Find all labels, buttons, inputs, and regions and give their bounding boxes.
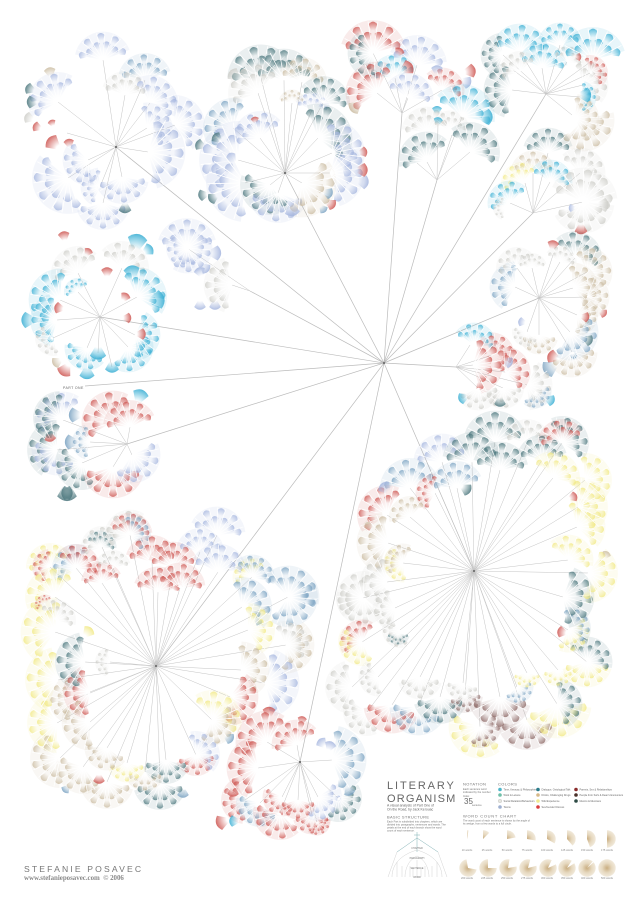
word count chart: 350 words bbox=[561, 876, 574, 880]
word count chart: 150 words bbox=[581, 848, 594, 852]
basic structure diagram: WORD bbox=[413, 876, 421, 879]
colors legend: Towns bbox=[504, 806, 511, 809]
word count caption: The word count of each sentence is shown by the angle of bbox=[463, 818, 530, 822]
branches bbox=[58, 60, 175, 203]
word count chart: 400 words bbox=[581, 876, 594, 880]
notation: indicated by the number bbox=[463, 790, 491, 794]
tree: chapter top middle bbox=[334, 20, 477, 116]
hub dots bbox=[115, 146, 475, 763]
word count chart heading: WORD COUNT CHART bbox=[463, 814, 517, 818]
title: LITERARY bbox=[387, 780, 456, 792]
branches bbox=[57, 420, 132, 467]
branches bbox=[352, 442, 588, 727]
colors legend: Sex/Gender Discuss bbox=[542, 806, 565, 809]
tree: chapter top left bbox=[16, 29, 213, 230]
word count chart: 225 words bbox=[481, 876, 494, 880]
basic structure heading: BASIC STRUCTURE bbox=[387, 814, 429, 820]
word count chart: 25 words bbox=[482, 848, 493, 852]
tree: chapter right tan bbox=[484, 222, 622, 383]
word count chart: 125 words bbox=[561, 848, 574, 852]
word count chart: 50 words bbox=[502, 848, 513, 852]
word count chart: 200 words bbox=[461, 876, 474, 880]
subtitle: On the Road, by Jack Kerouac bbox=[387, 808, 433, 812]
subtitle: A visual analysis of Part One of bbox=[387, 804, 434, 808]
part one label: PART ONE bbox=[63, 386, 84, 390]
notation bbox=[463, 782, 491, 807]
word count chart bbox=[459, 830, 616, 880]
colors legend: People from Sal's & Dean's Encounters bbox=[580, 794, 624, 797]
word count caption: its wedge, from a few words to a full circle. bbox=[463, 822, 512, 826]
main branches from central hub bbox=[85, 94, 546, 762]
colors legend: Drinks, Challenging Drugs bbox=[542, 794, 571, 797]
sections bbox=[454, 317, 557, 414]
sections bbox=[16, 29, 213, 230]
sections bbox=[389, 74, 511, 174]
branches bbox=[50, 535, 288, 783]
colors legend: Parents, Sex & Relationships bbox=[580, 788, 613, 792]
tree: chapter right yellow and white bbox=[480, 128, 622, 238]
tree: chapter bottom center red bbox=[214, 699, 371, 849]
sections bbox=[189, 37, 374, 230]
sections bbox=[479, 21, 625, 162]
sections bbox=[21, 378, 171, 501]
basic structure text: count of each sentence. bbox=[387, 828, 415, 832]
colors legend: Social Relations/Behaviours bbox=[504, 800, 535, 803]
sections bbox=[214, 699, 371, 849]
notation: NOTATION bbox=[463, 782, 486, 786]
tree: chapter bottom right large bbox=[325, 406, 626, 770]
tree: chapter left teal bbox=[20, 230, 178, 382]
basic structure text: petals at the end of each branch show the word bbox=[387, 826, 442, 830]
branches bbox=[245, 742, 338, 822]
word count chart: 75 words bbox=[522, 848, 533, 852]
sections bbox=[20, 230, 178, 382]
notation: sentence bbox=[472, 804, 482, 807]
title bbox=[387, 780, 456, 805]
sections bbox=[484, 222, 622, 383]
colors legend: Time, Kerouac & Philosophies bbox=[504, 788, 538, 792]
basic structure text: divided into paragraphs, sentences and words. The bbox=[387, 822, 446, 826]
basic structure diagram: SENTENCE bbox=[410, 867, 424, 870]
branches bbox=[456, 345, 527, 388]
notation: Index bbox=[463, 794, 470, 798]
title: ORGANISM bbox=[387, 793, 456, 805]
word count chart: 100 words bbox=[541, 848, 554, 852]
sections bbox=[325, 406, 626, 770]
tree: chapter small teal and grey bbox=[389, 74, 511, 180]
notation: 35 bbox=[464, 797, 473, 806]
colors legend: Wild Experience bbox=[542, 800, 560, 803]
colors legend bbox=[498, 782, 624, 809]
word count chart: 275 words bbox=[521, 876, 534, 880]
basic structure diagram bbox=[388, 832, 447, 879]
tree: chapter top right bbox=[479, 21, 625, 162]
colors legend: Dialogue, Ontological Talk bbox=[542, 788, 571, 792]
sections bbox=[158, 218, 232, 312]
tree: lavender chapter bbox=[158, 218, 250, 312]
branches bbox=[417, 117, 470, 180]
branches bbox=[503, 45, 593, 115]
basic structure diagram: CHAPTER bbox=[411, 847, 423, 850]
tree: chapter bottom left large bbox=[11, 500, 330, 810]
sections bbox=[480, 128, 622, 238]
basic structure diagram: PARAGRAPH bbox=[410, 857, 425, 860]
branches bbox=[515, 255, 587, 352]
author credit: STEFANIE POSAVEC bbox=[24, 864, 143, 874]
word count chart: 500 words bbox=[601, 876, 614, 880]
legend bbox=[387, 780, 624, 880]
branches bbox=[53, 268, 137, 367]
word count chart: 10 words bbox=[462, 848, 473, 852]
word count chart: 250 words bbox=[501, 876, 514, 880]
branches bbox=[233, 78, 332, 193]
basic structure text: Each Part is subdivided into chapters, which are bbox=[387, 820, 443, 824]
colors legend: COLORS bbox=[498, 782, 517, 786]
tree: chapter right small bbox=[454, 317, 557, 414]
colors legend: Work & Leisure bbox=[504, 794, 521, 797]
basic structure text bbox=[387, 820, 446, 832]
colors legend: Mexico & Mexicans bbox=[580, 800, 602, 803]
tree: chapter top center bbox=[189, 37, 374, 230]
author credit: www.stefanieposavec.com © 2006 bbox=[24, 875, 124, 882]
word count caption bbox=[463, 818, 530, 826]
word count chart: 300 words bbox=[541, 876, 554, 880]
word count chart: 175 words bbox=[601, 848, 614, 852]
tree: chapter left lower bbox=[21, 378, 171, 501]
sections bbox=[11, 500, 330, 810]
sections bbox=[334, 20, 477, 116]
subtitle bbox=[387, 804, 434, 812]
branches bbox=[373, 53, 442, 113]
branches bbox=[187, 248, 250, 291]
author credit bbox=[24, 864, 143, 882]
branches bbox=[510, 153, 583, 213]
notation: Each sentence word bbox=[463, 787, 487, 791]
